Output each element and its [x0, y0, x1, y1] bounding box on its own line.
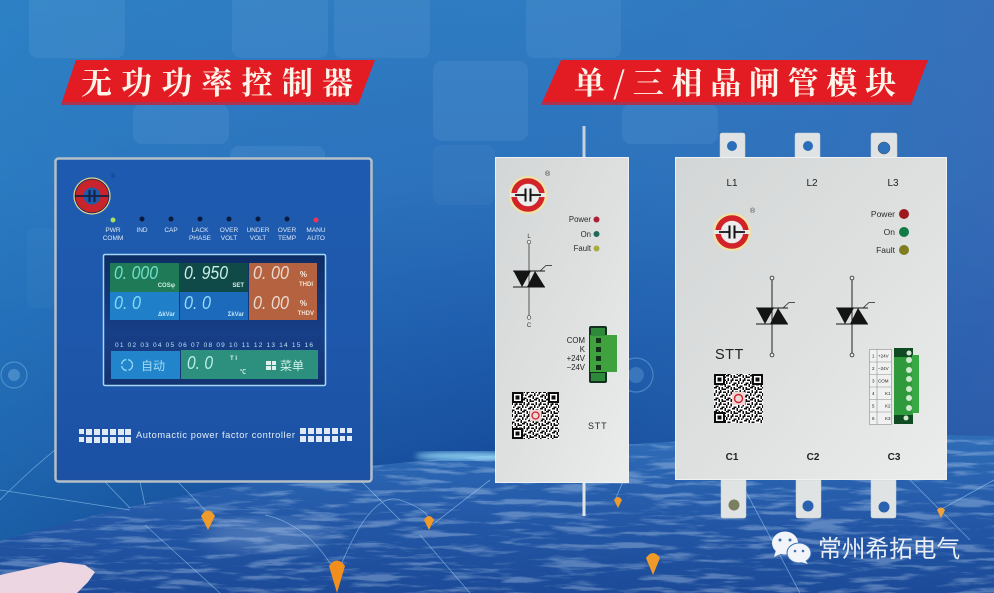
display screen: 0. 000 — [114, 263, 158, 283]
indicator labels: PWR — [105, 227, 121, 234]
display screen — [104, 254, 326, 386]
three-phase module logo — [713, 207, 756, 251]
panel: single-phase thyristor module — [496, 126, 628, 516]
indicator labels: AUTO — [307, 235, 325, 242]
three-phase module terminal table: 6 — [872, 416, 875, 421]
single module LEDs — [569, 215, 600, 253]
model text with dot grids: Automactic power factor controller — [136, 430, 295, 440]
display screen: THDV — [298, 311, 314, 317]
indicator labels — [103, 227, 326, 242]
line and load terminal labels: L2 — [806, 178, 818, 189]
title banner: reactive power controller: 无功功率控制器 — [81, 58, 353, 103]
three-phase module LEDs: Fault — [876, 245, 896, 255]
single module model label: STT — [588, 421, 607, 431]
display screen: 0. 00 — [253, 263, 289, 283]
display screen: ΣkVar — [228, 312, 245, 318]
indicator labels: OVER — [220, 227, 239, 234]
indicator labels: PHASE — [189, 235, 212, 242]
single module LEDs: Fault — [574, 244, 592, 253]
single module LEDs: On — [581, 230, 591, 239]
display screen: ℃ — [240, 369, 246, 376]
three-phase module terminal table: +24V — [878, 354, 889, 358]
panel: three-phase thyristor module — [676, 133, 946, 518]
indicator labels: LACK — [192, 227, 209, 234]
display screen: 自动 — [141, 359, 165, 373]
controller logo: ® — [111, 173, 116, 180]
single module QR code — [512, 392, 559, 439]
three-phase module terminal table: K2 — [885, 404, 891, 408]
three-phase module terminal table: 4 — [872, 391, 875, 396]
single module connector — [567, 326, 617, 383]
single module logo: ® — [545, 170, 551, 178]
single module thyristor symbol: C — [527, 323, 532, 329]
single module thyristor symbol: L — [527, 234, 531, 240]
model text with dot grids — [79, 428, 352, 443]
display screen: 01 02 03 04 05 06 07 08 09 10 11 12 13 14 15 16 — [115, 342, 313, 349]
single module logo — [509, 170, 551, 214]
indicator LEDs — [110, 216, 318, 222]
three-phase module terminal table: 1 — [872, 354, 875, 358]
controller logo — [74, 173, 116, 214]
three-phase module terminal table: K1 — [885, 391, 891, 396]
three-phase module terminal table — [870, 350, 892, 424]
three-phase module connector — [894, 348, 919, 424]
three-phase module terminal table: −24V — [878, 366, 889, 371]
display screen: 0. 00 — [253, 293, 289, 313]
display screen: % — [300, 270, 307, 279]
three-phase module LEDs: Power — [871, 209, 895, 219]
indicator labels: TEMP — [278, 235, 296, 242]
line and load terminal labels: L1 — [726, 178, 738, 189]
line and load terminal labels: L3 — [887, 178, 899, 189]
title banner: thyristor module: 单/三相晶闸管模块 — [574, 58, 896, 103]
three-phase module QR code — [714, 374, 763, 423]
thyristor symbols — [756, 276, 875, 357]
landmass at lower left — [0, 562, 95, 593]
three-phase module terminal table: COM — [878, 378, 889, 384]
display screen: 菜单 — [280, 359, 304, 373]
line and load terminal labels: C2 — [807, 452, 820, 463]
panel: power factor controller — [56, 158, 372, 482]
display screen: T I — [230, 356, 237, 362]
three-phase module terminal table: 2 — [872, 366, 875, 371]
three-phase module terminal table: 5 — [872, 404, 875, 408]
line and load terminal labels — [726, 178, 901, 463]
single module connector: K — [580, 345, 586, 354]
single module LEDs: Power — [569, 215, 591, 224]
indicator labels: COMM — [103, 235, 123, 242]
display screen: 0. 0 — [114, 293, 141, 313]
display screen: % — [300, 299, 307, 308]
terminal lugs — [720, 133, 897, 518]
three-phase module terminal table: 3 — [872, 378, 875, 384]
indicator labels: VOLT — [221, 235, 237, 242]
background: earth with clouds — [0, 430, 994, 593]
three-phase module LEDs — [871, 209, 909, 255]
three-phase module terminal table: K3 — [885, 416, 891, 421]
line and load terminal labels: C1 — [726, 452, 739, 463]
indicator labels: OVER — [278, 227, 297, 234]
single module connector: +24V — [567, 354, 586, 363]
indicator labels: VOLT — [250, 235, 266, 242]
watermark: WeChat icon — [772, 532, 811, 564]
network lines and map pins — [0, 450, 994, 593]
single module connector: COM — [567, 336, 585, 345]
single module connector: −24V — [567, 363, 586, 372]
display screen: THDI — [299, 282, 313, 288]
display screen: 0. 0 — [184, 293, 211, 313]
line and load terminal labels: C3 — [888, 452, 901, 463]
watermark: company name: 常州希拓电气 — [818, 536, 960, 563]
indicator labels: CAP — [164, 227, 178, 234]
display screen: SET — [232, 283, 244, 289]
three-phase module model label: STT — [715, 347, 744, 363]
indicator labels: MANU — [306, 227, 326, 234]
single module thyristor symbol — [513, 234, 552, 329]
three-phase module logo: ® — [750, 207, 756, 215]
display screen: 0. 0 — [187, 353, 213, 373]
indicator labels: IND — [136, 227, 148, 234]
display screen: 0. 950 — [184, 263, 228, 283]
indicator labels: UNDER — [246, 227, 270, 234]
display screen: COSφ — [158, 283, 176, 289]
three-phase module LEDs: On — [884, 227, 895, 237]
display screen: ΔkVar — [158, 312, 176, 318]
